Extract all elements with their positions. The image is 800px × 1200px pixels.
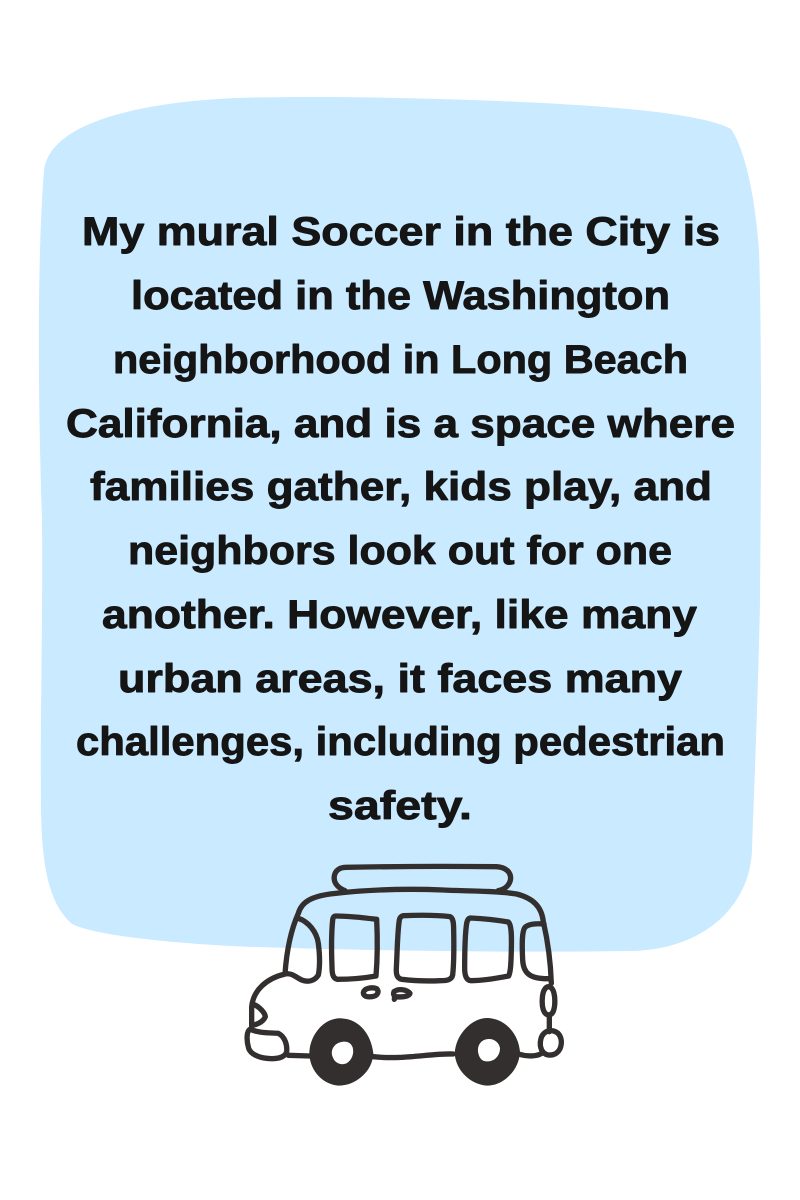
text block: mural description [66,210,735,828]
rear window [522,924,550,979]
front bumper [247,1029,287,1059]
front cab window [285,918,320,981]
text block: mural description: neighborhood in Long Beach [113,338,688,382]
text block: mural description: My mural Soccer in the City is [82,210,720,254]
text block: mural description: neighbors look out for one [128,529,672,573]
text block: mural description: safety. [328,784,472,828]
bus body outline [252,889,551,1058]
text block: mural description: located in the Washington [131,274,670,318]
panel: blue blob background [39,97,761,952]
text block: mural description: urban areas, it faces many [118,657,683,701]
text block: mural description: another. However, like many [102,593,698,637]
text block: mural description: California, and is a space where [66,402,735,446]
roof rack [334,866,511,891]
headlight [253,1004,265,1025]
rear bumper [540,1031,561,1055]
rear wheel [455,1019,519,1085]
passenger windows [332,916,377,979]
icon: hand-drawn bus [247,866,561,1085]
text block: mural description: challenges, including pedestrian [76,720,725,764]
front wheel [310,1019,373,1085]
rear light [542,987,555,1015]
text block: mural description: families gather, kids play, and [90,465,712,509]
door handles [363,988,378,997]
